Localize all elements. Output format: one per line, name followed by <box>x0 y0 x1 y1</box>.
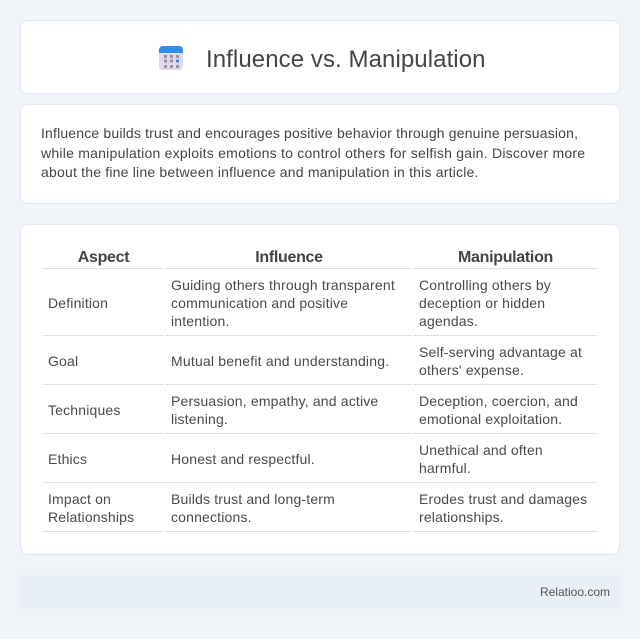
row: Techniques: Deception, coercion, and <box>419 393 578 409</box>
intro text: about the fine line between influence and manipulation in this article. <box>41 164 479 180</box>
intro text: Influence builds trust and encourages positive behavior through genuine persuasion, <box>41 125 578 141</box>
table <box>43 268 597 532</box>
row: Techniques: Persuasion, empathy, and active <box>171 393 378 409</box>
row: Goal: others' expense. <box>419 362 524 378</box>
header: Influence: Influence <box>255 249 323 266</box>
row: Ethics: Honest and respectful. <box>171 451 315 467</box>
footer text: Relatioo.com <box>540 585 610 599</box>
row: Definition: agendas. <box>419 313 478 329</box>
intro panel <box>20 104 620 204</box>
title: Influence vs. Manipulation <box>206 46 486 73</box>
header: Aspect: Aspect <box>78 249 129 266</box>
row: Impact on Relationships: Impact on <box>48 491 111 507</box>
row: Impact on Relationships: Builds trust and long-term <box>171 491 335 507</box>
row: Definition: Definition <box>48 295 108 311</box>
row: Goal: Self-serving advantage at <box>419 344 582 360</box>
intro text <box>41 125 585 180</box>
row: Goal <box>48 344 582 378</box>
icon: calendar <box>159 46 183 70</box>
row: Techniques: emotional exploitation. <box>419 411 562 427</box>
row: Definition: Guiding others through transparent <box>171 277 395 293</box>
row: Definition: communication and positive <box>171 295 348 311</box>
row: Impact on Relationships <box>48 491 587 525</box>
row: Definition <box>48 277 551 329</box>
row: Ethics: Unethical and often <box>419 442 543 458</box>
row: Definition: deception or hidden <box>419 295 545 311</box>
footer bar <box>20 575 620 609</box>
row: Techniques: Techniques <box>48 402 121 418</box>
row: Definition: intention. <box>171 313 230 329</box>
row: Techniques <box>48 393 578 427</box>
row: Goal: Mutual benefit and understanding. <box>171 353 389 369</box>
header: Manipulation: Manipulation <box>458 249 553 266</box>
row: Definition: Controlling others by <box>419 277 551 293</box>
row: Impact on Relationships: relationships. <box>419 509 504 525</box>
row: Ethics: harmful. <box>419 460 471 476</box>
row: Impact on Relationships: connections. <box>171 509 252 525</box>
title panel <box>20 20 620 94</box>
row: Impact on Relationships: Relationships <box>48 509 134 525</box>
intro text: while manipulation exploits emotions to control others for selfish gain. Discover more <box>41 145 585 161</box>
row: Ethics: Ethics <box>48 451 87 467</box>
row: Ethics <box>48 442 543 476</box>
row: Techniques: listening. <box>171 411 228 427</box>
table panel <box>20 224 620 555</box>
row: Goal: Goal <box>48 353 78 369</box>
row: Impact on Relationships: Erodes trust and damages <box>419 491 587 507</box>
